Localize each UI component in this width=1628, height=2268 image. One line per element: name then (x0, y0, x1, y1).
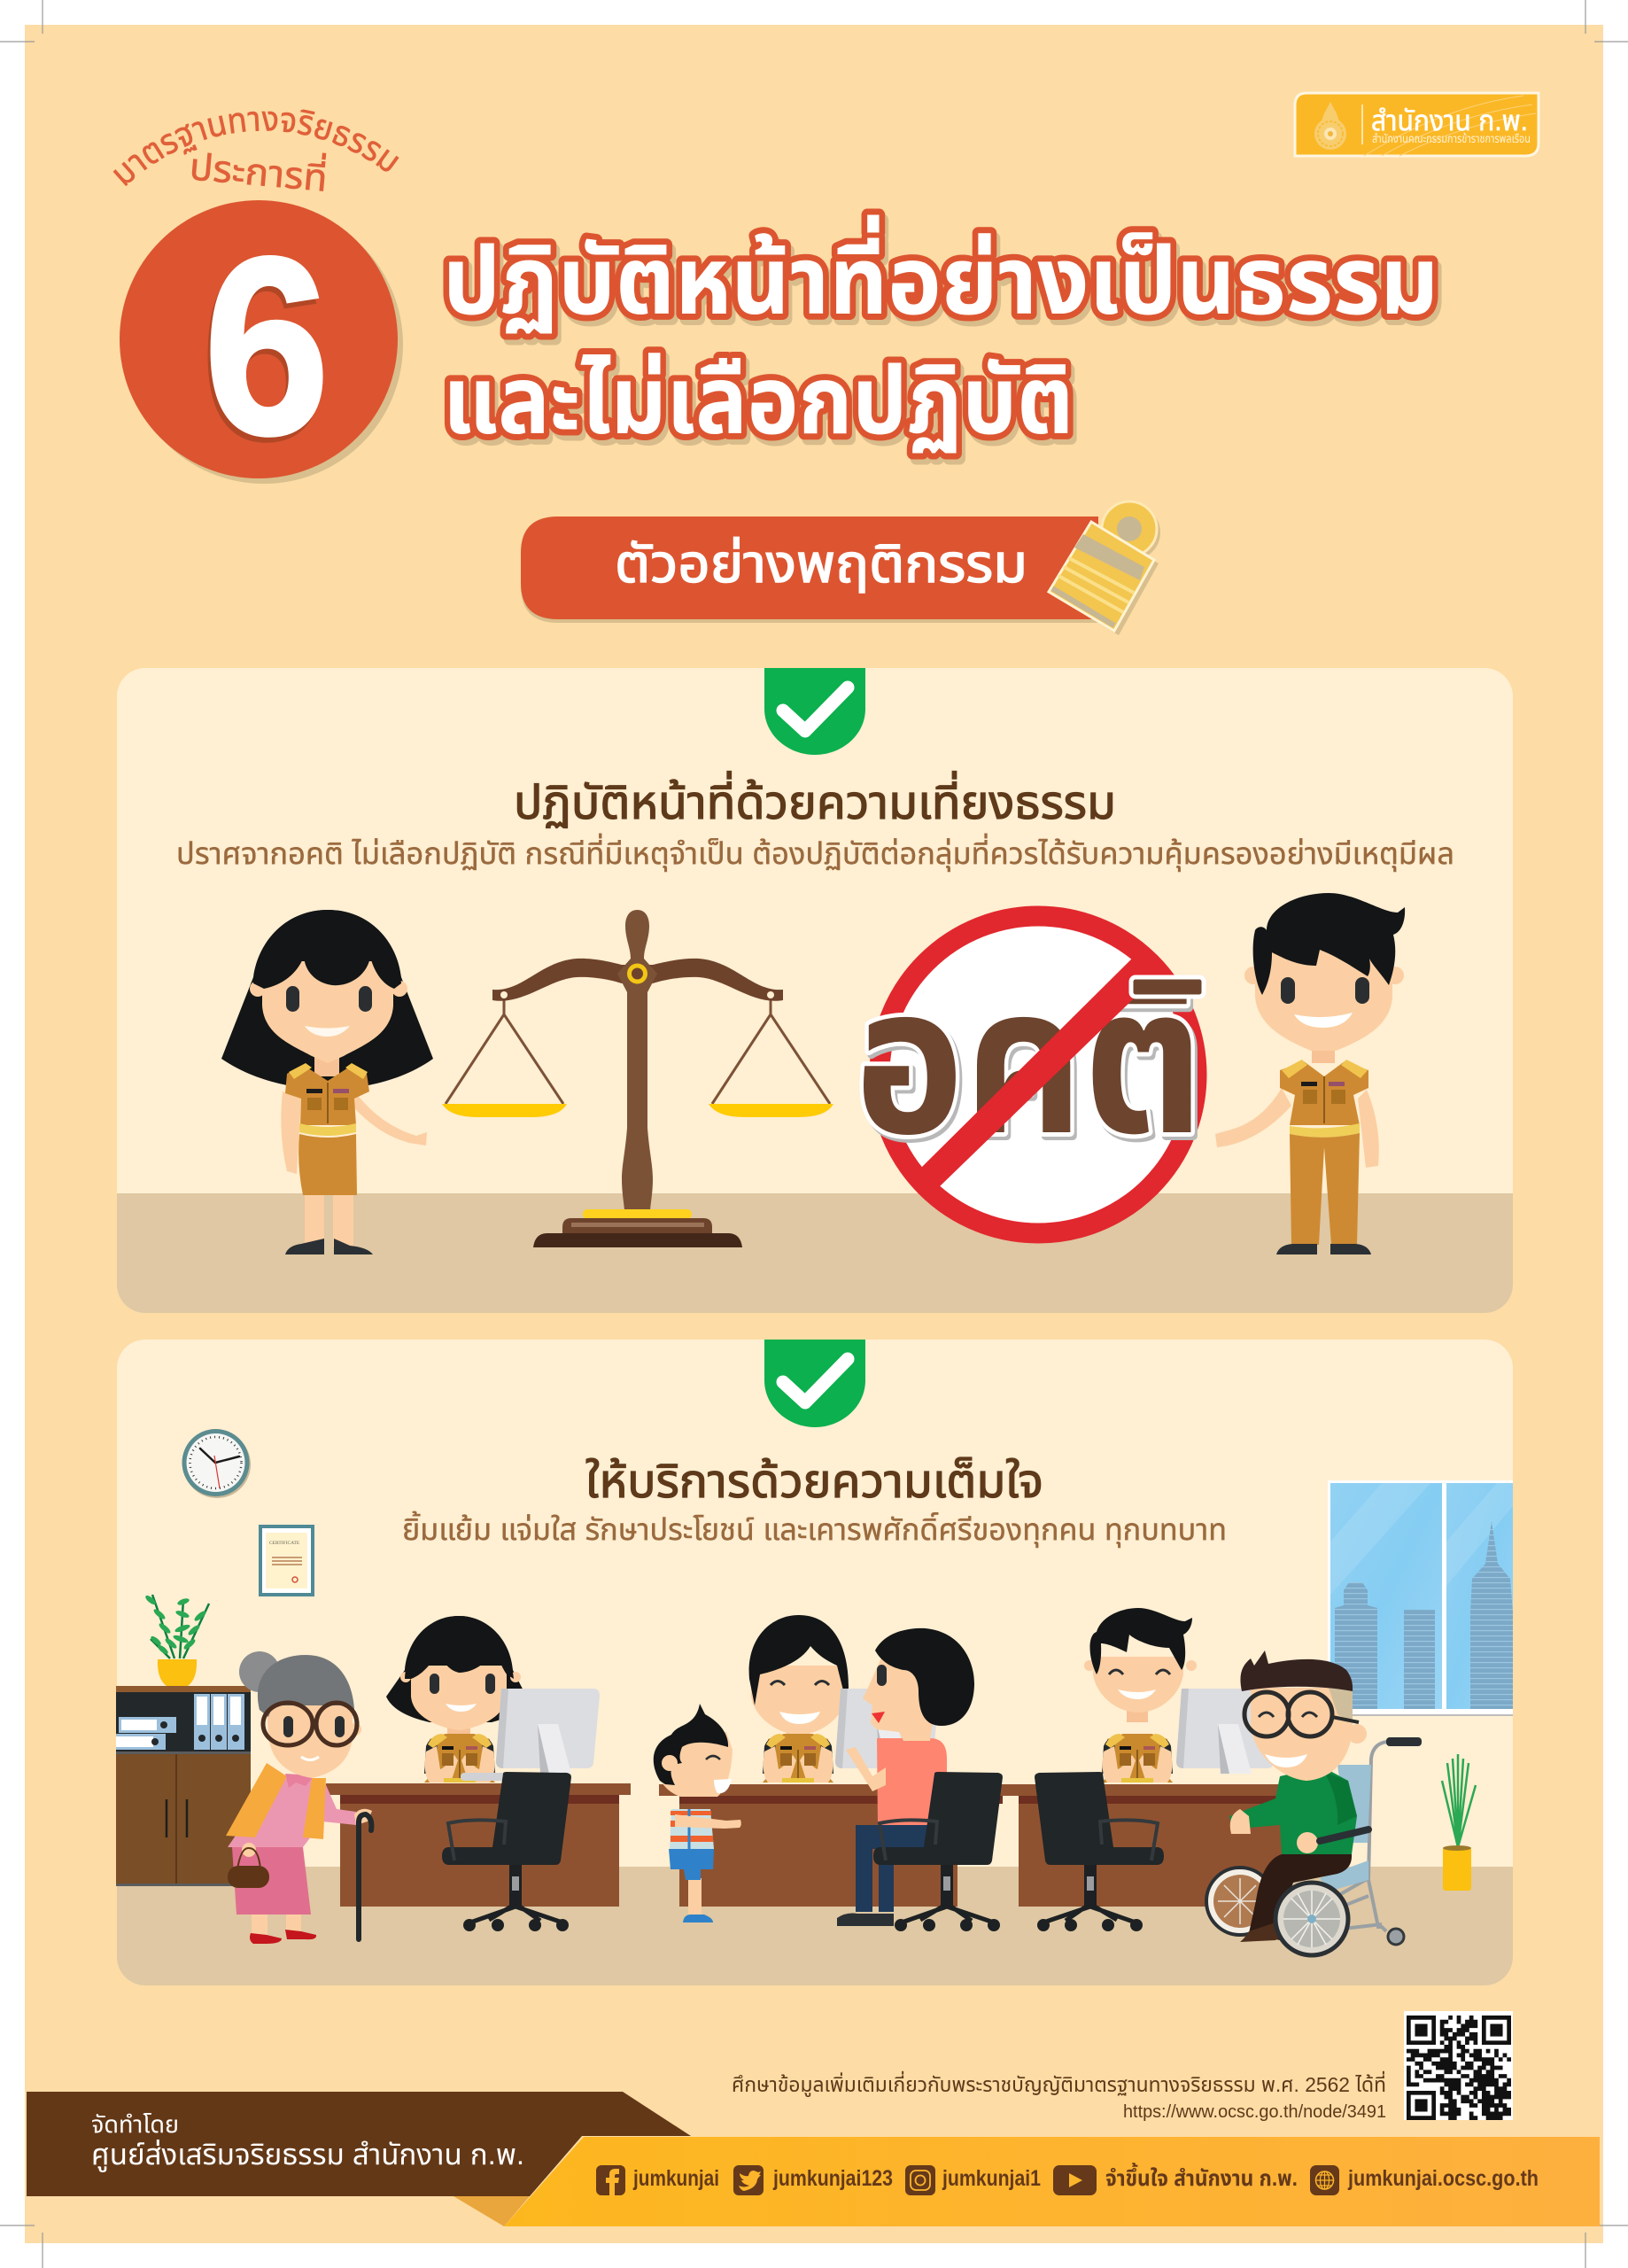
sweater (1229, 1770, 1357, 1854)
icon: green check shield (764, 668, 865, 755)
scarf (226, 1763, 326, 1839)
reference text (732, 2070, 1386, 2122)
character: female officer (221, 910, 433, 1254)
binders (116, 1694, 244, 1750)
character: elderly woman (226, 1651, 372, 1944)
label: youtube channel: จำขึ้นใจ สำนักงาน ก.พ. (1105, 2163, 1298, 2191)
scale hangers (446, 999, 830, 1104)
panel: fair duty (117, 668, 1513, 1313)
hand, cane, bag (354, 1809, 372, 1825)
icon: potted plant (144, 1594, 209, 1686)
fold triangle (454, 2196, 530, 2226)
icon: rank epaulette (1049, 501, 1160, 635)
word: bias: อคติ (855, 947, 1204, 1177)
logo subtitle: สำนักงานคณะกรรมการข้าราชการพลเรือน (1372, 132, 1531, 145)
number circle (125, 206, 403, 484)
footer: publisher banner (27, 2092, 691, 2196)
head (1347, 1724, 1367, 1744)
publisher name: ศูนย์ส่งเสริมจริยธรรม สำนักงาน ก.พ. (91, 2138, 524, 2172)
label: jumkunjai1: jumkunjai1 (942, 2166, 1041, 2191)
label: jumkunjai: jumkunjai (632, 2166, 719, 2191)
trousers (1249, 1854, 1352, 1940)
chair 1 (442, 1772, 571, 1931)
icon: green check shield (764, 1340, 865, 1427)
icon: instagram (905, 2165, 935, 2195)
wheelchair frame (1302, 1742, 1387, 1931)
icon: twitter (733, 2165, 764, 2195)
QR code (1404, 2011, 1513, 2120)
icon: emblem (1314, 102, 1346, 150)
label: website: jumkunjai.ocsc.go.th (1347, 2166, 1539, 2191)
curved label: มาตรฐานทางจริยธรรม (113, 110, 399, 186)
arms (1215, 1088, 1379, 1168)
character: customer (837, 1628, 974, 1926)
uniform (285, 1065, 369, 1125)
front wheel (1275, 1883, 1348, 1955)
skyline buildings (1335, 1521, 1513, 1709)
post (617, 910, 657, 1210)
beam (492, 959, 783, 1001)
reference sentence: ศึกษาข้อมูลเพิ่มเติมเกี่ยวกับพระราชบัญญัติมาตรฐานทางจริยธรรม พ.ศ. 2562 ได้ที่ (732, 2070, 1386, 2098)
face (349, 1723, 361, 1736)
label: ประการที่: ประการที่ (188, 141, 329, 199)
chair 2 (873, 1772, 1003, 1931)
icon: website globe (1310, 2165, 1339, 2195)
cabinet with binders (116, 1686, 251, 1886)
panel: service with willingness (116, 1340, 1513, 1985)
character: male officer (1215, 893, 1405, 1254)
back wheel (1206, 1868, 1274, 1935)
panel description: ยิ้มแย้ม แจ่มใส รักษาประโยชน์ และเคารพศักดิ์ศรีของทุกคน ทุกบทบาท (402, 1511, 1227, 1548)
scale pans (442, 1104, 567, 1117)
title line 1: ปฏิบัติหน้าที่อย่างเป็นธรรม (443, 215, 1438, 334)
desk 1 (340, 1795, 619, 1907)
icon: floor plant (1442, 1754, 1476, 1891)
window with skyline (1328, 1480, 1513, 1716)
desk 2 and 3 (659, 1689, 1286, 1907)
logo name: สำนักงาน ก.พ. (1371, 105, 1528, 136)
panel heading: ปฏิบัติหน้าที่ด้วยความเที่ยงธรรม (514, 771, 1116, 829)
panel heading: ให้บริการด้วยความเต็มใจ (585, 1456, 1043, 1508)
hands (1230, 1809, 1251, 1834)
glasses (1244, 1692, 1289, 1736)
icon: balance scales (442, 910, 833, 1247)
icon: framed certificate (259, 1525, 314, 1596)
pill heading: example behaviours (521, 501, 1160, 635)
reference url: https://www.ocsc.go.th/node/3491 (1123, 2102, 1386, 2122)
icon: wall clock (182, 1429, 251, 1498)
icon: facebook (596, 2165, 625, 2195)
arms (281, 1091, 427, 1174)
panel description: ปราศจากอคติ ไม่เลือกปฏิบัติ กรณีที่มีเหตุจำเป็น ต้องปฏิบัติต่อกลุ่มที่ควรได้รับความคุ้มครองอย่างมีเหตุมีผล (176, 833, 1454, 872)
numeral 6: 6 (204, 206, 329, 487)
chair 3 (1035, 1772, 1164, 1931)
bun and hair (239, 1651, 280, 1692)
footer: social band (454, 2137, 1600, 2226)
yellow band (504, 2137, 1600, 2226)
base (583, 1209, 692, 1219)
glasses (263, 1703, 313, 1745)
character: male officer 2 at desk (749, 1615, 849, 1783)
publisher label: จัดทำโดย (91, 2111, 179, 2138)
badge: standard number 6 (113, 110, 403, 487)
icon: prohibition sign (855, 916, 1204, 1233)
pill text: ตัวอย่างพฤติกรรม (615, 534, 1027, 594)
prohibition slash (921, 953, 1160, 1187)
desk 1 top and computer (326, 1689, 631, 1795)
logo badge: OCSC (1295, 93, 1539, 156)
bar of sara i (1131, 977, 1204, 997)
main title (443, 215, 1438, 454)
character: male officer 3 at desk (1084, 1608, 1280, 1783)
character: man in wheelchair (1206, 1651, 1422, 1955)
title line 2: และไม่เลือกปฏิบัติ (443, 347, 1074, 454)
icon: framed certificate: CERTIFICATE (269, 1541, 300, 1546)
label: jumkunjai123: jumkunjai123 (772, 2166, 893, 2191)
character: child (654, 1704, 741, 1922)
character: female officer at desk (386, 1616, 529, 1783)
icon: youtube (1053, 2165, 1097, 2195)
uniform (1280, 1061, 1368, 1125)
